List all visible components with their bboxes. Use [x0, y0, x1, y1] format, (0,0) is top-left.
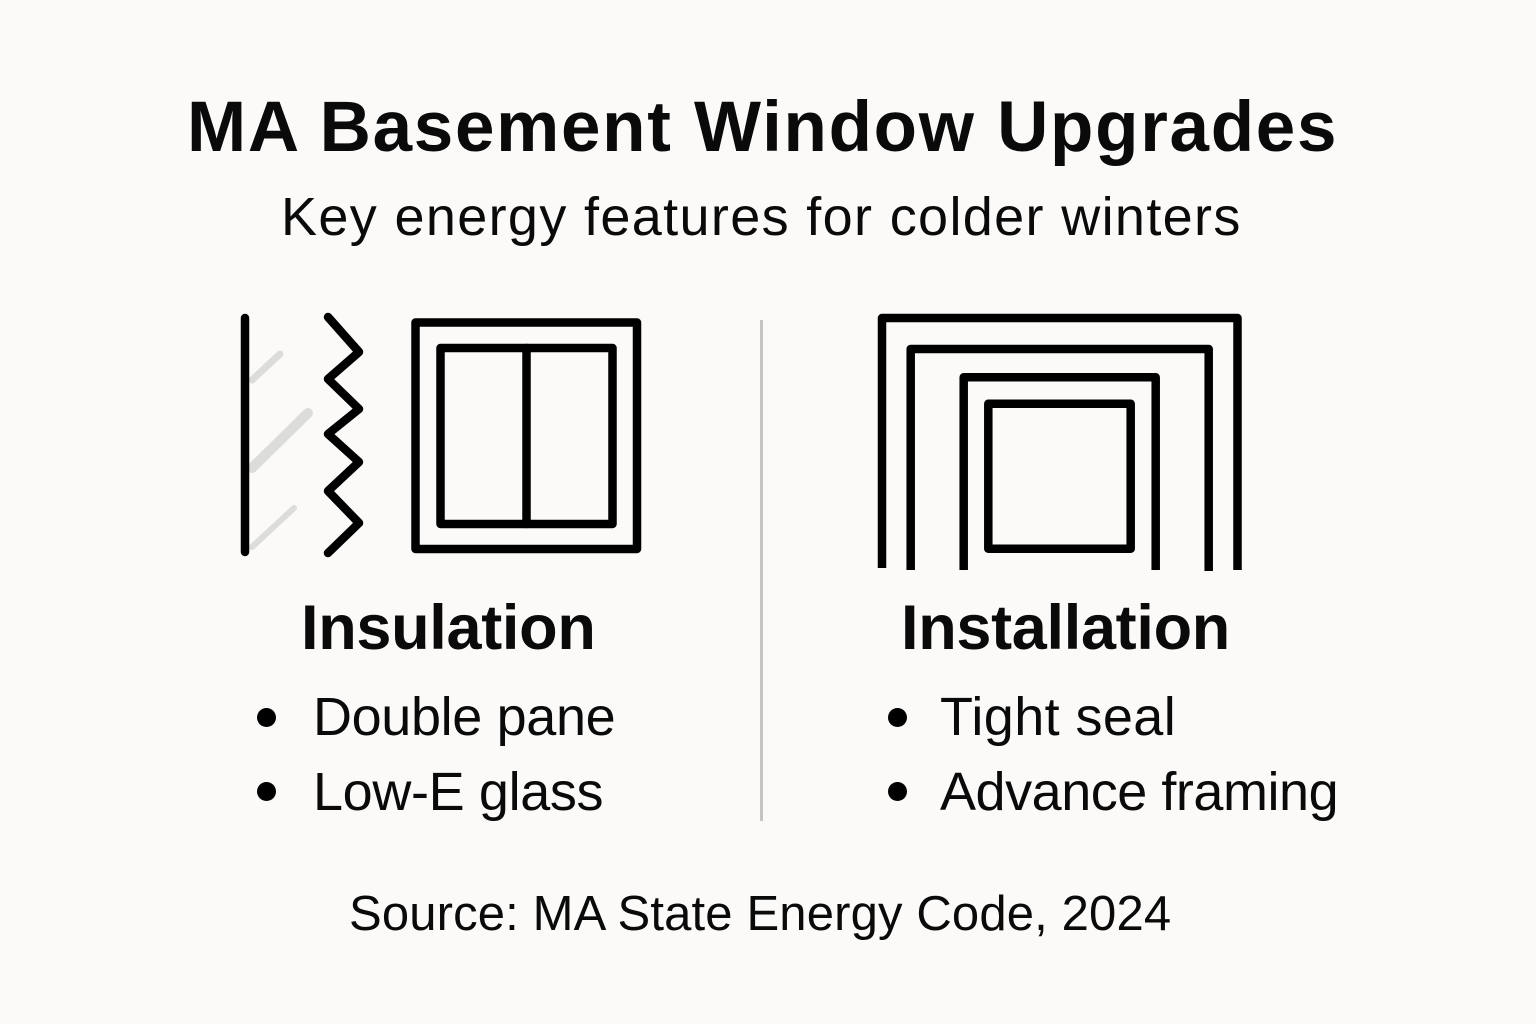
source: Source: MA State Energy Code, 2024	[349, 887, 1171, 941]
bullet	[888, 782, 907, 801]
bullet	[257, 782, 276, 801]
icon: insulation	[240, 312, 642, 558]
list: installation	[888, 687, 1338, 822]
item: Advance framing	[940, 762, 1338, 822]
heading: installation: Installation	[901, 593, 1230, 663]
divider	[760, 320, 763, 821]
icon: installation	[878, 314, 1242, 571]
item: Low-E glass	[313, 762, 603, 822]
list: insulation	[257, 687, 615, 822]
subtitle: Key energy features for colder winters	[281, 187, 1242, 247]
heading: insulation: Insulation	[301, 593, 596, 663]
item: Tight seal	[940, 687, 1176, 747]
bullet	[888, 708, 907, 727]
bullet	[257, 708, 276, 727]
title: MA Basement Window Upgrades	[187, 88, 1338, 167]
item: Double pane	[313, 687, 615, 747]
